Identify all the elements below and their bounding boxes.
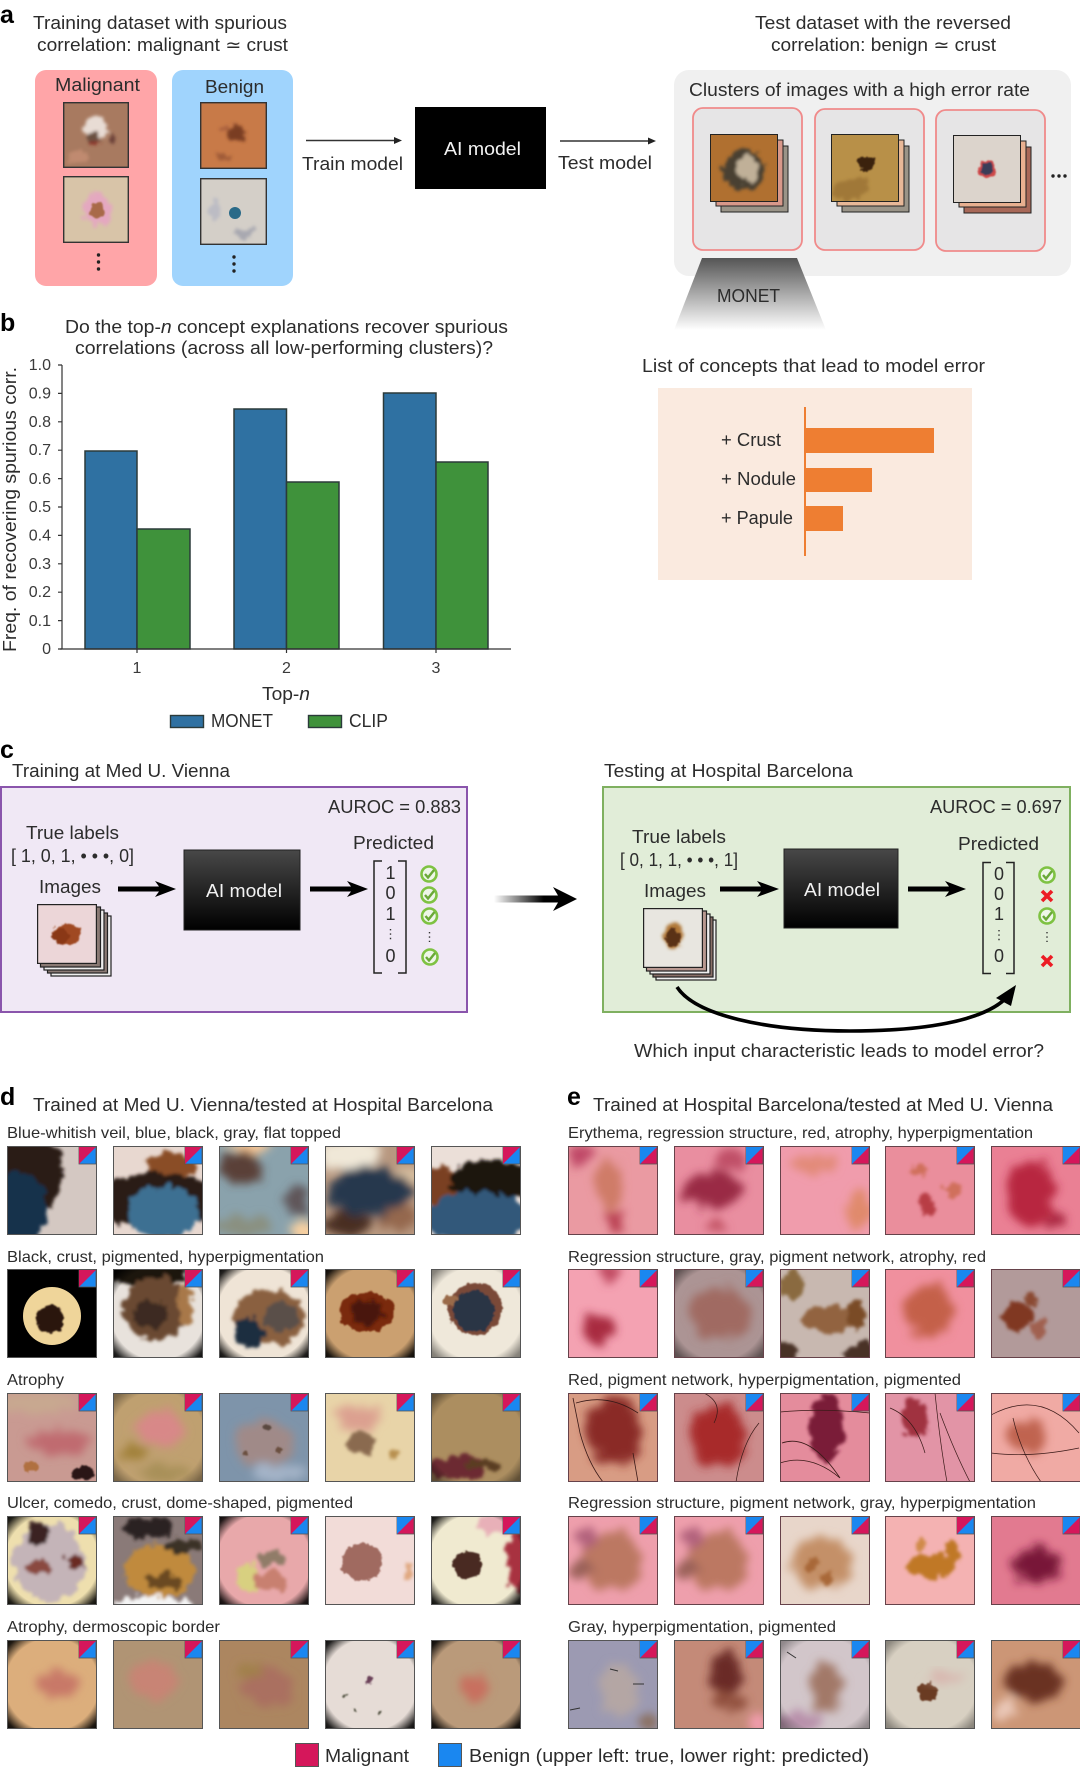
bar: papule bbox=[721, 506, 843, 531]
row label e1: Erythema, regression structure, red, atrophy, hyperpigmentation bbox=[568, 1125, 1033, 1142]
label: train model: Train model bbox=[302, 154, 403, 174]
predicted vector bbox=[374, 861, 406, 973]
image stack bbox=[37, 904, 111, 976]
panel: training box: AUROC = 0.883 bbox=[328, 797, 461, 817]
image row e1 bbox=[568, 1144, 1080, 1235]
thumb bbox=[431, 1393, 521, 1482]
AI model box bbox=[184, 850, 300, 930]
panel label d: d bbox=[0, 1083, 15, 1111]
thumb bbox=[325, 1640, 415, 1729]
panel: testing box bbox=[603, 787, 1070, 1012]
panel label b: b bbox=[0, 309, 15, 337]
thumb bbox=[219, 1269, 309, 1358]
thumb bbox=[674, 1640, 769, 1732]
panel label e: e bbox=[567, 1083, 581, 1111]
thumb bbox=[113, 1146, 203, 1235]
result marks bbox=[1040, 868, 1054, 966]
panel: training box: Predicted bbox=[353, 833, 434, 853]
thumb bbox=[325, 1269, 415, 1358]
thumb bbox=[113, 1269, 203, 1358]
image row e5 bbox=[568, 1640, 1080, 1732]
thumb bbox=[219, 1516, 309, 1605]
thumb bbox=[780, 1516, 870, 1605]
ellipsis bbox=[1051, 174, 1067, 178]
chart title: correlations (across all low-performing clusters)? bbox=[75, 338, 493, 358]
panel: testing box: AUROC = 0.697 bbox=[930, 797, 1062, 817]
cluster 2 bbox=[815, 109, 924, 250]
thumb bbox=[431, 1516, 521, 1605]
cluster 1 bbox=[693, 108, 802, 250]
thumb bbox=[7, 1393, 97, 1482]
y axis ticks: 0.3 bbox=[29, 556, 51, 573]
bar: nodule: + Nodule bbox=[721, 469, 796, 489]
thumb bbox=[991, 1640, 1080, 1729]
y axis ticks: 0.9 bbox=[29, 386, 51, 402]
transfer arrow bbox=[494, 887, 577, 911]
thumb bbox=[885, 1640, 975, 1729]
row label e3: Red, pigment network, hyperpigmentation, pigmented bbox=[568, 1372, 961, 1389]
image row d1 bbox=[0, 1134, 533, 1246]
panel: training box: True labels bbox=[26, 823, 119, 843]
row label e4: Regression structure, pigment network, gray, hyperpigmentation bbox=[568, 1495, 1036, 1512]
curved feedback arrow bbox=[677, 985, 1016, 1031]
panel: benign samples bbox=[172, 70, 293, 286]
AI model box bbox=[415, 107, 546, 189]
y axis ticks: 0.4 bbox=[29, 528, 51, 544]
x axis: 3 bbox=[432, 660, 441, 677]
panel: malignant samples: Malignant bbox=[55, 75, 140, 95]
vertical dots bbox=[232, 255, 236, 273]
malignant photo 1 bbox=[63, 102, 129, 168]
panel: testing box: True labels bbox=[632, 827, 726, 847]
AI model box: AI model bbox=[804, 880, 880, 900]
arrow bbox=[720, 881, 779, 897]
heading: panel e: Trained at Hospital Barcelona/tested at Med U. Vienna bbox=[593, 1095, 1054, 1115]
thumb bbox=[885, 1516, 975, 1605]
heading: training dataset: Training dataset with spurious bbox=[33, 13, 287, 33]
bar: crust bbox=[721, 428, 934, 453]
panel: benign samples: Benign bbox=[205, 77, 264, 97]
thumb bbox=[674, 1269, 764, 1358]
thumb bbox=[7, 1640, 97, 1729]
x axis: 1 bbox=[133, 660, 142, 677]
y axis ticks: 0.1 bbox=[29, 613, 51, 630]
arrow bbox=[310, 881, 368, 897]
thumb bbox=[431, 1640, 521, 1729]
legend: malignant and benign bbox=[296, 1744, 869, 1766]
chart title bbox=[65, 317, 508, 358]
arrow: train model bbox=[306, 137, 402, 144]
panel: malignant samples bbox=[35, 70, 157, 286]
predicted vector: 1 bbox=[385, 904, 396, 924]
thumb bbox=[219, 1640, 309, 1729]
thumb bbox=[991, 1516, 1080, 1605]
bar chart: frequency of recovering spurious correlation bbox=[0, 357, 511, 731]
predicted vector: 0 bbox=[385, 946, 396, 966]
panel label c: c bbox=[0, 736, 14, 764]
panel: testing box: [ 0, 1, 1, • • •, 1] bbox=[620, 850, 738, 870]
predicted vector: 0 bbox=[994, 864, 1004, 884]
y axis ticks: 0 bbox=[42, 641, 51, 658]
chart title: Do the top- n concept explanations recover spurious bbox=[65, 317, 508, 337]
thumb bbox=[568, 1516, 658, 1605]
row label d3: Atrophy bbox=[7, 1372, 64, 1389]
bar: crust: + Crust bbox=[721, 430, 781, 450]
thumb bbox=[7, 1516, 97, 1605]
AI model box: AI model bbox=[206, 881, 282, 901]
vertical dots bbox=[97, 253, 100, 271]
thumb bbox=[568, 1393, 658, 1482]
legend bbox=[170, 711, 388, 731]
bar: papule: + Papule bbox=[721, 508, 793, 528]
thumb bbox=[991, 1393, 1080, 1482]
AI model box bbox=[784, 849, 898, 928]
thumb bbox=[674, 1516, 764, 1605]
panel: concept bar chart bbox=[658, 388, 972, 580]
y axis ticks: 0.2 bbox=[29, 584, 51, 601]
heading: training dataset: correlation: malignant ≃ crust bbox=[37, 35, 288, 55]
arrow bbox=[908, 881, 966, 897]
image row e3 bbox=[568, 1393, 1080, 1482]
thumb bbox=[774, 1640, 870, 1732]
image row d2 bbox=[7, 1262, 521, 1358]
thumb bbox=[568, 1640, 658, 1730]
predicted vector: 0 bbox=[994, 946, 1004, 966]
image row d4 bbox=[7, 1514, 531, 1612]
heading: training at Med U. Vienna: Training at Med U. Vienna bbox=[12, 761, 231, 781]
thumb bbox=[674, 1393, 764, 1482]
thumb bbox=[885, 1269, 975, 1358]
thumb bbox=[780, 1269, 870, 1358]
thumb bbox=[885, 1393, 975, 1482]
thumb bbox=[568, 1269, 658, 1358]
arrow bbox=[118, 881, 176, 897]
predicted vector bbox=[983, 862, 1014, 974]
AI model box: AI model bbox=[444, 139, 521, 159]
thumb bbox=[325, 1146, 415, 1235]
panel: testing box: Predicted bbox=[958, 834, 1039, 854]
heading: test dataset: Test dataset with the reversed bbox=[755, 13, 1011, 33]
MONET trapezoid: MONET bbox=[717, 286, 780, 306]
thumb bbox=[674, 1146, 764, 1235]
thumb bbox=[113, 1516, 203, 1605]
y axis ticks bbox=[29, 357, 62, 658]
thumb bbox=[780, 1393, 870, 1482]
heading: test dataset bbox=[755, 13, 1011, 55]
bars bbox=[85, 393, 488, 649]
heading: panel d: Trained at Med U. Vienna/tested at Hospital Barcelona bbox=[33, 1095, 494, 1115]
thumb bbox=[885, 1146, 975, 1235]
thumb bbox=[7, 1146, 97, 1235]
malignant photo 2 bbox=[63, 176, 129, 243]
heading: test dataset: correlation: benign ≃ crust bbox=[771, 35, 996, 55]
heading: testing at Hospital Barcelona: Testing at Hospital Barcelona bbox=[604, 761, 854, 781]
image row e2 bbox=[568, 1265, 1080, 1366]
row label d5: Atrophy, dermoscopic border bbox=[7, 1619, 221, 1636]
legend: CLIP bbox=[349, 711, 388, 731]
x axis: 2 bbox=[282, 660, 291, 677]
question caption: Which input characteristic leads to model error? bbox=[634, 1041, 1044, 1061]
panel: training box: [ 1, 0, 1, • • •, 0] bbox=[11, 846, 134, 866]
panel: clusters with high error rate: Clusters of images with a high error rate bbox=[689, 80, 1030, 100]
heading: list of concepts: List of concepts that lead to model error bbox=[642, 356, 985, 376]
benign photo 1 bbox=[200, 102, 267, 169]
benign photo 2 bbox=[200, 178, 267, 245]
MONET trapezoid bbox=[674, 258, 826, 330]
panel: clusters with high error rate bbox=[674, 70, 1071, 276]
bar: nodule bbox=[721, 468, 872, 492]
thumb bbox=[991, 1269, 1080, 1358]
predicted vector: 0 bbox=[385, 883, 396, 903]
thumb bbox=[991, 1146, 1080, 1235]
y axis ticks: 0.6 bbox=[29, 471, 51, 488]
predicted vector: 1 bbox=[994, 904, 1004, 924]
row label e5: Gray, hyperpigmentation, pigmented bbox=[568, 1619, 836, 1636]
legend: malignant and benign: Malignant bbox=[325, 1746, 409, 1766]
arrow: test model bbox=[560, 138, 656, 144]
panel: testing box: Images bbox=[644, 881, 706, 901]
result marks bbox=[422, 866, 438, 964]
thumb bbox=[780, 1146, 870, 1235]
legend: MONET bbox=[211, 711, 273, 731]
panel label a: a bbox=[0, 1, 15, 29]
row label d1: Blue-whitish veil, blue, black, gray, flat topped bbox=[7, 1125, 341, 1142]
x axis: Top-n bbox=[262, 684, 310, 704]
thumb bbox=[568, 1146, 658, 1235]
thumb bbox=[325, 1393, 415, 1482]
thumb bbox=[431, 1269, 521, 1358]
thumb bbox=[113, 1393, 203, 1482]
y axis ticks: 0.8 bbox=[29, 414, 51, 431]
y axis ticks: 1.0 bbox=[29, 357, 51, 374]
thumb bbox=[7, 1269, 97, 1358]
thumb bbox=[219, 1393, 309, 1482]
thumb bbox=[113, 1640, 203, 1729]
y axis label: Freq. of recovering spurious corr. bbox=[0, 367, 20, 652]
image row e4 bbox=[568, 1516, 1080, 1605]
legend: malignant and benign: Benign (upper left: true, lower right: predicted) bbox=[469, 1746, 869, 1766]
row label d4: Ulcer, comedo, crust, dome-shaped, pigmented bbox=[7, 1495, 353, 1512]
image row d3 bbox=[0, 1393, 521, 1482]
panel: training box bbox=[1, 787, 467, 1012]
thumb bbox=[219, 1146, 309, 1235]
y axis ticks: 0.7 bbox=[29, 442, 51, 459]
image row d5 bbox=[7, 1640, 521, 1729]
thumb bbox=[431, 1146, 521, 1235]
y axis ticks: 0.5 bbox=[29, 499, 51, 516]
row label e2: Regression structure, gray, pigment network, atrophy, red bbox=[568, 1249, 986, 1266]
panel: training box: Images bbox=[39, 877, 101, 897]
x axis bbox=[60, 649, 511, 704]
row label d2: Black, crust, pigmented, hyperpigmentation bbox=[7, 1249, 324, 1266]
cluster 3 bbox=[936, 110, 1045, 251]
predicted vector: 0 bbox=[994, 884, 1004, 904]
heading: training dataset bbox=[33, 13, 288, 55]
label: test model: Test model bbox=[558, 153, 652, 173]
predicted vector: 1 bbox=[385, 863, 396, 883]
thumb bbox=[325, 1516, 415, 1605]
image stack bbox=[643, 908, 716, 980]
